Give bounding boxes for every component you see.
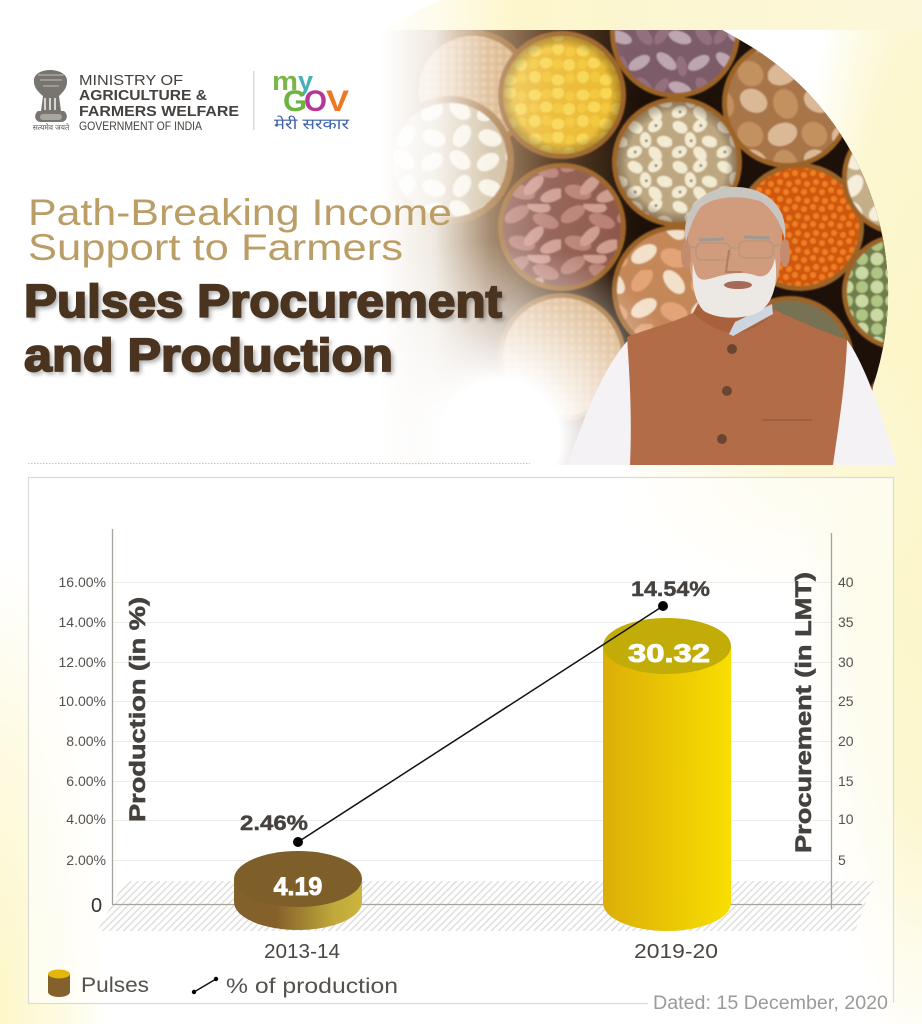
bowl: pale lentils — [498, 293, 626, 421]
ministry name: AGRICULTURE & — [79, 88, 208, 104]
legend label: pulses: Pulses — [81, 974, 149, 997]
right axis title: Procurement (in LMT) — [791, 572, 816, 853]
left axis labels: 14.00% — [59, 614, 106, 630]
left axis labels: 12.00% — [59, 654, 106, 670]
line: percent of production — [293, 601, 668, 847]
bowl: brown broad beans — [721, 48, 843, 168]
category label: 2019-20: 2019-20 — [634, 941, 718, 963]
logo: MyGov — [272, 66, 350, 133]
logo: MyGov: O — [304, 85, 327, 118]
bowl: speckled beans — [611, 225, 698, 336]
data label: 2.46%: 2.46% — [240, 812, 308, 835]
subtitle: Support to Farmers — [28, 227, 403, 268]
subtitle: Path-Breaking Income — [28, 192, 452, 233]
bar: 2013-14: 4.19 — [274, 873, 322, 901]
right axis labels — [838, 574, 854, 868]
bowl: bottom right — [870, 379, 876, 391]
right axis labels: 15 — [838, 773, 854, 789]
subtitle — [28, 192, 452, 268]
right axis labels: 25 — [838, 693, 854, 709]
ministry name: MINISTRY OF — [79, 72, 183, 89]
left axis labels: 16.00% — [59, 574, 106, 590]
main title — [24, 275, 505, 384]
bowl: faded white beans — [399, 96, 514, 222]
grid lines — [112, 582, 831, 860]
icon: state emblem: सत्यमेव जयते — [33, 123, 70, 132]
logo: MyGov: V — [326, 85, 349, 118]
bar: 2019-20 — [603, 618, 731, 931]
header logos — [33, 66, 350, 133]
right axis labels: 35 — [838, 614, 854, 630]
jacket — [627, 310, 847, 465]
logo: MyGov: m — [272, 66, 298, 96]
right axis labels: 40 — [838, 574, 854, 590]
left axis labels: 10.00% — [59, 693, 106, 709]
category label: 2013-14: 2013-14 — [264, 941, 340, 963]
glasses — [688, 241, 784, 260]
icon: cylinder — [48, 970, 70, 997]
bowl: faded top left — [426, 30, 517, 137]
shirt sleeves — [567, 338, 897, 465]
bowl: kidney beans — [498, 163, 626, 291]
left axis labels: 4.00% — [66, 811, 106, 827]
bowl: yellow split peas — [498, 31, 626, 159]
buttons — [727, 344, 737, 354]
zero label: 0 — [91, 895, 102, 917]
face — [688, 192, 782, 312]
bowl: white beans right — [841, 148, 882, 233]
date stamp: Dated: 15 December, 2020 — [653, 993, 888, 1014]
data label: 14.54%: 14.54% — [631, 578, 710, 601]
icon: state emblem — [33, 70, 70, 132]
bowl: black-eyed peas — [612, 97, 742, 227]
logo: MyGov: G — [283, 85, 307, 118]
right axis labels: 20 — [838, 733, 854, 749]
left axis labels — [59, 574, 106, 868]
left axis labels: 6.00% — [66, 773, 106, 789]
floor hatch — [97, 881, 874, 931]
left axis labels: 2.00% — [66, 852, 106, 868]
bar: 2013-14 — [234, 851, 362, 930]
icon: line — [192, 977, 218, 994]
portrait — [567, 187, 897, 465]
main title: Pulses Procurement — [24, 275, 502, 327]
logo: MyGov: y — [298, 66, 313, 96]
bowl: red lentils — [736, 163, 864, 291]
beard — [692, 258, 776, 318]
hair — [685, 187, 785, 242]
main title: Pulses Procurement — [27, 278, 505, 330]
bowl: mixed lentils behind portrait — [770, 295, 854, 351]
right axis labels: 5 — [838, 852, 846, 868]
photo: bowls of pulses — [394, 30, 888, 465]
ministry name: GOVERNMENT OF INDIA — [79, 119, 202, 133]
main title: and Production — [24, 329, 393, 381]
left axis title: Production (in %) — [125, 597, 150, 822]
collar — [693, 300, 775, 334]
right axis labels: 30 — [838, 654, 854, 670]
legend label: percent of production: % of production — [226, 975, 398, 998]
bar: 2019-20: 30.32 — [628, 640, 710, 668]
chart panel — [28, 478, 894, 1014]
left axis labels: 8.00% — [66, 733, 106, 749]
right axis labels: 10 — [838, 811, 854, 827]
main title: and Production — [27, 332, 396, 384]
legend — [48, 970, 398, 998]
bowl: mauve beans — [609, 30, 740, 98]
ministry name — [79, 72, 239, 133]
bowl: green peas — [841, 236, 888, 348]
ministry name: FARMERS WELFARE — [79, 104, 239, 120]
logo: MyGov: मेरी सरकार — [274, 115, 350, 133]
axes — [112, 529, 862, 909]
